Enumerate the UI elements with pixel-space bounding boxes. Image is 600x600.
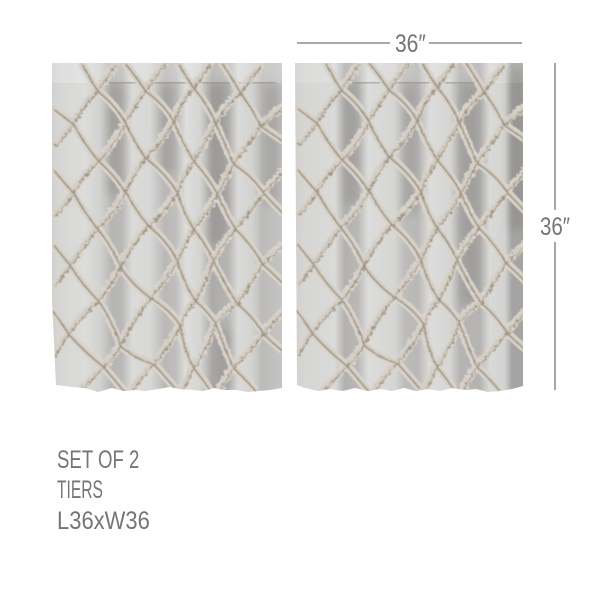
product description text: L36xW36 <box>57 507 150 534</box>
height dimension: 36 inches: 36″ <box>540 212 570 240</box>
product description text: SET OF 2 <box>57 445 139 474</box>
product description text: TIERS <box>57 476 103 504</box>
width dimension: 36 inches: 36″ <box>395 29 426 57</box>
panel: left curtain <box>52 63 283 395</box>
panel: right curtain <box>295 62 526 395</box>
product description text <box>57 445 150 534</box>
